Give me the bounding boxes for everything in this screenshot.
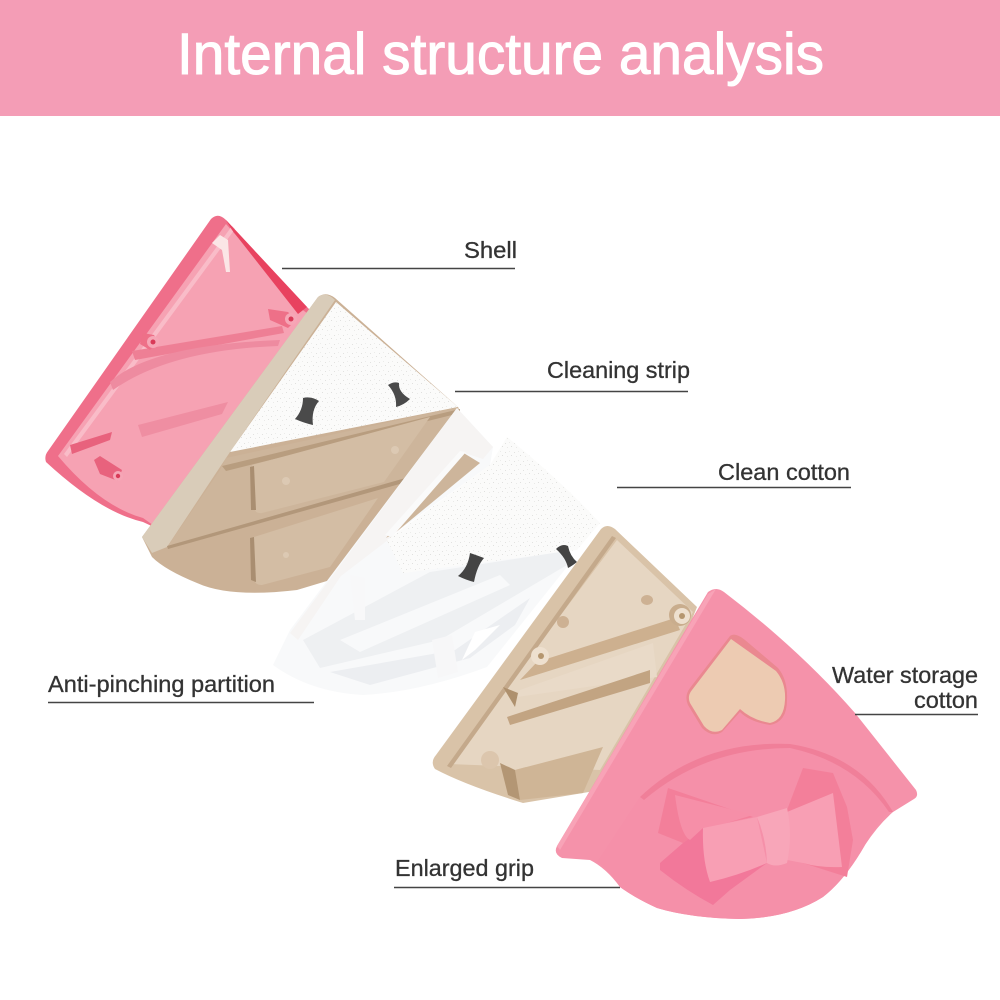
part: clean cotton: [273, 408, 600, 695]
label: cleaning strip: Cleaning strip: [547, 357, 690, 383]
part: cleaning strip: [142, 294, 480, 593]
icon: bow: [658, 768, 853, 905]
title: Internal structure analysis: [177, 22, 824, 87]
label: shell: Shell: [464, 237, 517, 263]
label: water storage cotton: [832, 662, 978, 714]
label: water storage cotton: Water storage: [832, 662, 978, 688]
header banner: [0, 0, 1000, 116]
icon: heart window: [686, 635, 787, 734]
label: enlarged grip: Enlarged grip: [395, 855, 534, 881]
part: water storage cotton: [433, 526, 697, 803]
icon: magnet clip right: [388, 382, 410, 407]
label: water storage cotton: cotton: [914, 687, 978, 713]
label: clean cotton: Clean cotton: [718, 459, 850, 485]
part: shell: [45, 216, 330, 530]
icon: magnet clip left: [458, 553, 484, 582]
part: enlarged grip: [556, 589, 917, 919]
icon: magnet clip right: [556, 545, 577, 568]
label: anti-pinching partition: Anti-pinching partition: [48, 671, 275, 697]
icon: magnet clip left: [295, 397, 319, 425]
